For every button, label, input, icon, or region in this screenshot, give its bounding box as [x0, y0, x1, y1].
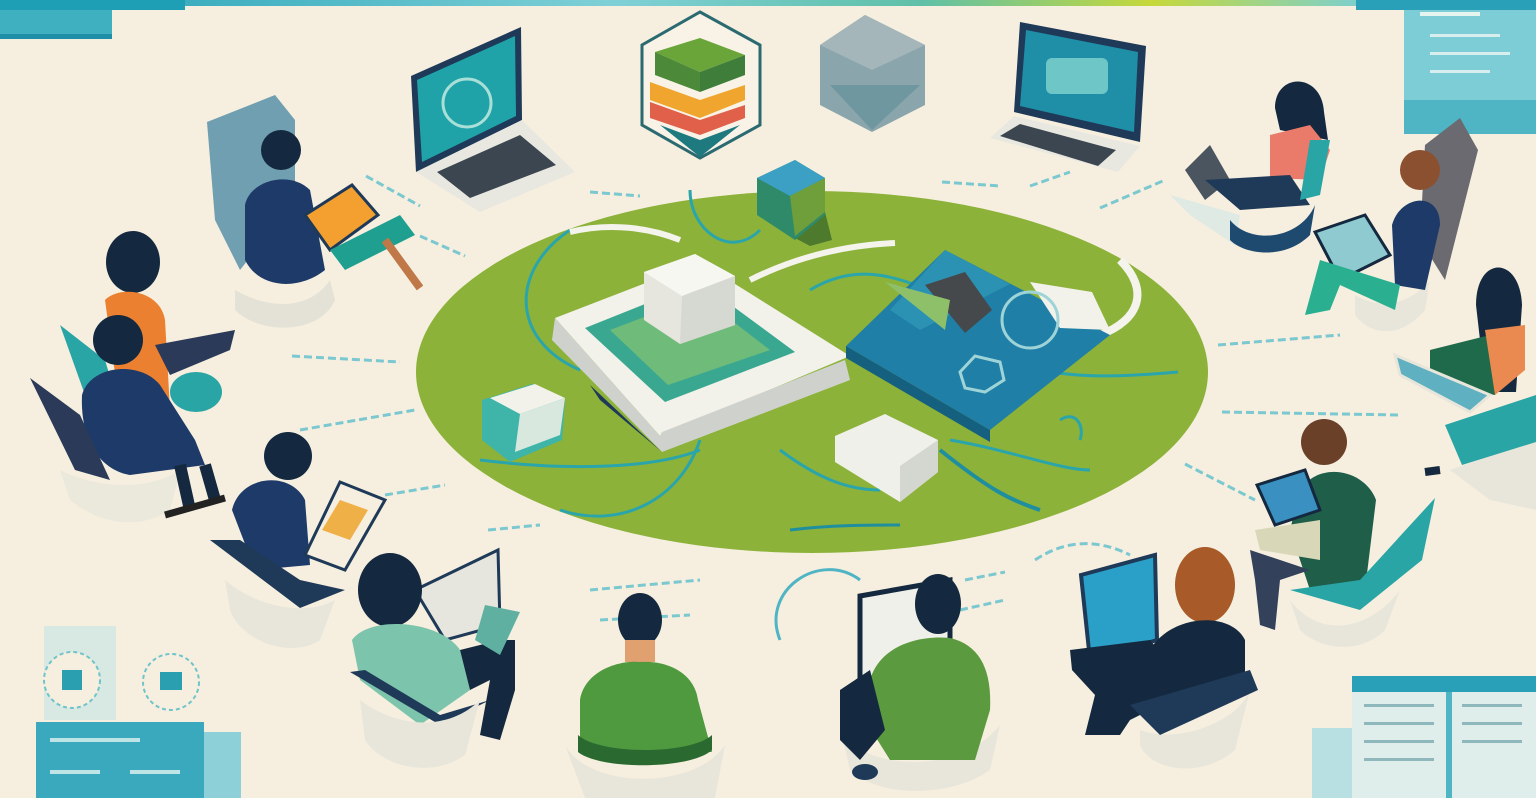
- person 4: teal with board: [350, 550, 520, 768]
- top gradient strip: [0, 0, 1536, 6]
- person 3: reading document: [210, 432, 385, 648]
- corner panel: top right: [1356, 0, 1536, 134]
- top icon: grey hex cube: [820, 15, 925, 132]
- top icon: stacked layers: [642, 12, 760, 158]
- connector arc: [776, 570, 860, 640]
- corner panel: top left: [0, 0, 185, 39]
- person 7: laptop with brown hair: [1070, 547, 1258, 769]
- floating cube on ellipse: [757, 160, 832, 246]
- central green ellipse: [416, 191, 1208, 553]
- corner panel: bottom left: [36, 626, 241, 798]
- central device: blue book: [846, 250, 1110, 442]
- top icon: right laptop: [990, 22, 1146, 172]
- corner panel: bottom right: [1312, 676, 1536, 798]
- person 5: back view center: [565, 593, 725, 798]
- person 6: green back view with monitor: [840, 574, 1000, 791]
- white swooshes: [570, 227, 1137, 335]
- person 10: top right pair: [1170, 81, 1478, 331]
- central device: white tray: [552, 254, 850, 452]
- connector dashes: [292, 172, 1400, 620]
- top icon: left laptop: [411, 27, 575, 212]
- network curves: [480, 190, 1178, 530]
- person 9: far right edge: [1395, 268, 1536, 510]
- small white box left: [482, 384, 565, 462]
- white cube: [644, 254, 735, 344]
- person 8: green sweater with tablet: [1250, 419, 1435, 647]
- person 1: top left with tablet: [207, 95, 420, 328]
- person 2: left pair orange: [30, 231, 235, 522]
- small white box bottom: [835, 414, 938, 502]
